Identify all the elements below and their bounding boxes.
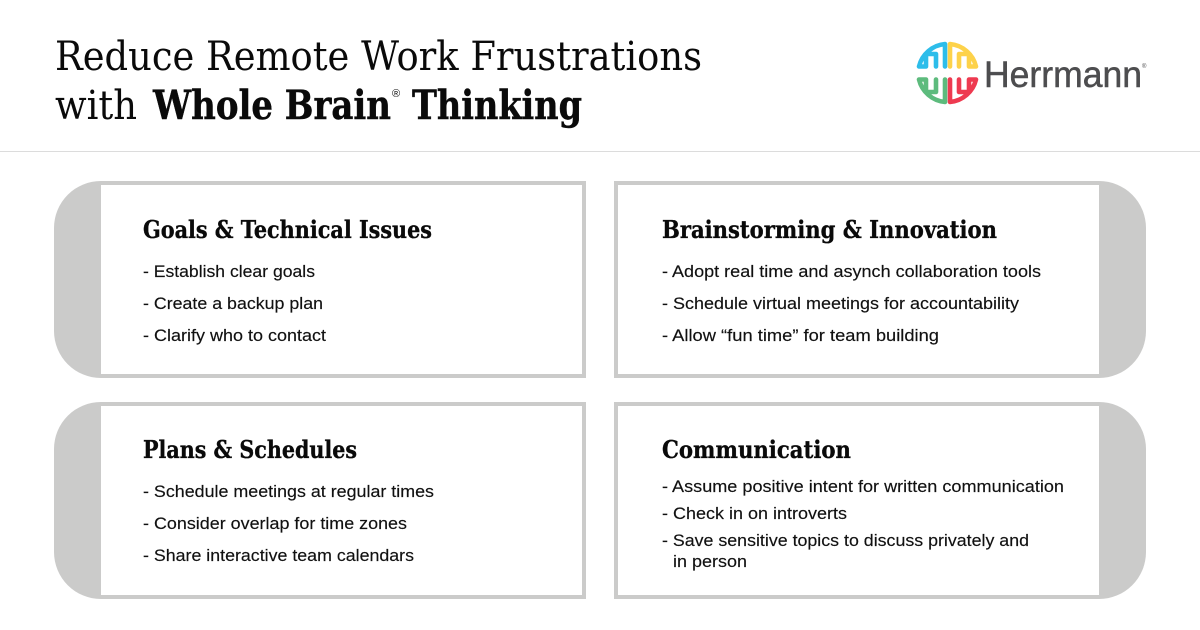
list: - Clarify who to contact [143,327,326,345]
list: - Assume positive intent for written communication [662,478,1064,496]
list: - Allow “fun time” for team building [662,327,939,345]
panel: goals and technical issues [54,181,586,378]
heading: Communication [662,435,851,464]
title: Thinking [412,82,582,129]
list: - Share interactive team calendars [143,547,414,565]
panel: communication [614,402,1146,599]
heading: Brainstorming & Innovation [662,215,997,244]
panel: brainstorming and innovation [614,181,1146,378]
title: ® [392,88,400,100]
list [143,483,434,565]
registered mark: ® [1142,63,1147,70]
list: in person [673,553,747,571]
wordmark: Herrmann [984,54,1142,95]
logo: Herrmann [919,44,1147,102]
heading: Goals & Technical Issues [143,215,432,244]
header divider [0,151,1200,152]
title: Whole Brain [152,82,391,129]
heading: Plans & Schedules [143,435,357,464]
list [662,263,1041,345]
list: - Schedule meetings at regular times [143,483,434,501]
list [662,478,1064,571]
list: - Schedule virtual meetings for accountability [662,295,1020,313]
list: - Save sensitive topics to discuss privately and [662,532,1029,550]
list: - Consider overlap for time zones [143,515,407,533]
title: Reduce Remote Work Frustrations [55,34,702,80]
list: - Establish clear goals [143,263,315,281]
list: - Create a backup plan [143,295,323,313]
icon: four-colour knot [919,44,976,102]
list: - Adopt real time and asynch collaboration tools [662,263,1041,281]
panel: plans and schedules [54,402,586,599]
list: - Check in on introverts [662,505,847,523]
list [143,263,326,345]
title: with [55,83,137,129]
title [55,34,702,129]
